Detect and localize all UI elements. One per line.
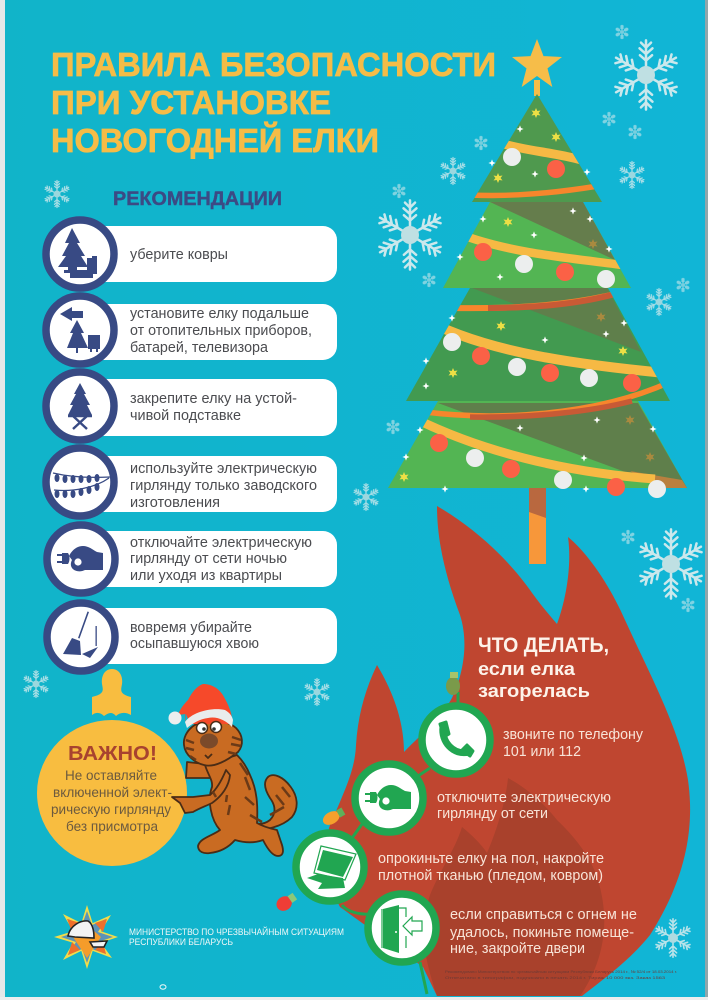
- garland wire: [342, 692, 458, 994]
- item: keep tree away from heaters: батарей, телевизора: [130, 340, 269, 356]
- item: factory-made garland: используйте электрическую: [130, 461, 317, 477]
- bulb: red: [274, 890, 299, 914]
- step: call: звоните по телефону: [503, 727, 644, 743]
- icon: hand with plug: [57, 546, 103, 571]
- item: fix tree on stand: чивой подставке: [130, 408, 241, 424]
- icon: blanket over fallen tree: [307, 846, 356, 889]
- item: keep tree away from heaters: установите елку подальше: [130, 306, 309, 322]
- cat stripes: [186, 737, 290, 822]
- heading: what to do: [478, 634, 609, 701]
- cat tail: [250, 775, 297, 829]
- item: keep tree away from heaters: [46, 296, 337, 364]
- bulb: orange: [320, 806, 346, 828]
- ornament cap: [92, 669, 131, 716]
- item: keep tree away from heaters: от отопительных приборов,: [130, 323, 312, 339]
- bulb: green: [446, 672, 460, 695]
- fine print: Отпечатано в типографии, подписано в печать 2014 г. Тираж 10 000 экз. Заказ 1563: [445, 975, 666, 980]
- icon: tree on stand: [68, 383, 92, 415]
- item: sweep needles: осыпавшуюся хвою: [130, 636, 259, 652]
- icon: garland: [53, 473, 110, 498]
- heading: what to do: ЧТО ДЕЛАТЬ,: [478, 634, 609, 657]
- cat head: [184, 721, 242, 766]
- fine print: Рекомендовано Министерством по чрезвычайным ситуациям Республики Беларусь 2014 г., № 52/4 от 18.03.2014 г.: [445, 969, 677, 974]
- item: remove carpets: уберите ковры: [130, 247, 228, 263]
- item: fix tree on stand: закрепите елку на устой-: [130, 391, 297, 407]
- step: leave the room: [368, 894, 637, 962]
- star: [512, 39, 562, 96]
- ornaments: [430, 148, 666, 498]
- trunk: [529, 488, 546, 564]
- icon: door with arrow: [382, 905, 422, 953]
- icon: tree with carpet: [58, 228, 97, 278]
- step: leave the room: если справиться с огнем не: [450, 907, 637, 923]
- step: unplug: отключите электрическую: [437, 790, 611, 806]
- tree sparkles: [400, 108, 657, 493]
- item: unplug garland: отключайте электрическую: [130, 535, 312, 551]
- item: sweep needles: вовремя убирайте: [130, 620, 252, 636]
- title: НОВОГОДНЕЙ ЕЛКИ: [51, 121, 379, 159]
- garlands: [418, 143, 670, 479]
- callout: important ornament: [37, 669, 187, 866]
- cat arm behind: [186, 762, 212, 778]
- tree tiers: [388, 94, 687, 488]
- item: sweep needles: [47, 603, 337, 671]
- step: cover the tree: плотной тканью (пледом, ковром): [378, 868, 603, 884]
- Christmas tree: [388, 39, 687, 564]
- callout: important ornament: рическую гирлянду: [51, 801, 171, 817]
- callout: important ornament: включенной элект-: [53, 784, 172, 800]
- step: unplug: гирлянду от сети: [437, 806, 548, 822]
- item: remove carpets: [46, 220, 337, 288]
- step: leave the room: удалось, покиньте помеще-: [450, 925, 634, 941]
- icon: phone: [440, 722, 473, 756]
- item: factory-made garland: [46, 448, 337, 516]
- step: unplug: [355, 764, 611, 832]
- ministry logo: [54, 905, 344, 969]
- callout: important ornament: Не оставляйте: [65, 767, 157, 783]
- icon: hand with plug: [365, 785, 411, 810]
- cat eyes: [196, 722, 222, 734]
- santa hat: [178, 684, 232, 724]
- cat pointing arm: [172, 770, 230, 813]
- title: ПРАВИЛА БЕЗОПАСНОСТИ: [51, 46, 496, 83]
- callout: important ornament: без присмотра: [66, 818, 158, 834]
- icon: arrow, tree and heater: [60, 307, 100, 353]
- item: factory-made garland: изготовления: [130, 495, 220, 511]
- cat mascot: [168, 684, 297, 856]
- title: ПРИ УСТАНОВКЕ: [51, 84, 331, 121]
- step: call: [422, 706, 644, 774]
- heading: what to do: если елка: [478, 658, 576, 679]
- step: call: 101 или 112: [503, 744, 581, 760]
- step: leave the room: ние, закройте двери: [450, 941, 585, 957]
- heading: recommendations: РЕКОМЕНДАЦИИ: [113, 189, 282, 210]
- item: unplug garland: гирлянду от сети ночью: [130, 551, 287, 567]
- flame: [326, 506, 690, 996]
- item: unplug garland: или уходя из квартиры: [130, 568, 282, 584]
- icon: broom and dustpan: [63, 612, 98, 658]
- item: factory-made garland: гирлянду только заводского: [130, 478, 317, 494]
- fine print: [445, 969, 677, 980]
- heading: what to do: загорелась: [478, 680, 590, 701]
- item: unplug garland: [47, 525, 337, 593]
- step: cover the tree: опрокиньте елку на пол, накройте: [378, 851, 604, 867]
- item: fix tree on stand: [46, 372, 337, 440]
- title: [51, 46, 496, 159]
- cat body: [198, 755, 283, 856]
- ministry logo: РЕСПУБЛИКИ БЕЛАРУСЬ: [129, 937, 233, 947]
- ministry logo: МИНИСТЕРСТВО ПО ЧРЕЗВЫЧАЙНЫМ СИТУАЦИЯМ: [129, 926, 344, 937]
- cat nose: [200, 734, 218, 748]
- step: cover the tree: [296, 833, 604, 901]
- callout: important ornament: ВАЖНО!: [68, 742, 157, 765]
